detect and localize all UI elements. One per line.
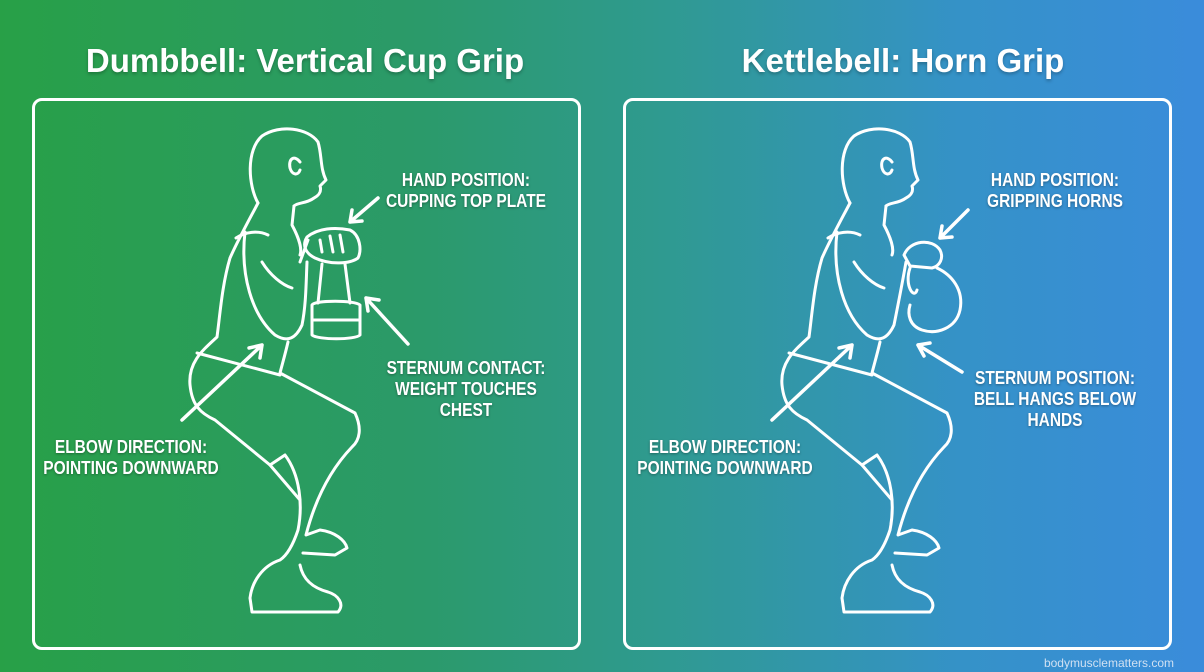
label: hand position dumbbell: CUPPING TOP PLATE (386, 191, 546, 211)
label: sternum position: HANDS (1027, 410, 1083, 430)
label: sternum position: STERNUM POSITION: (975, 368, 1135, 388)
label: elbow direction kettlebell: ELBOW DIRECTION: (649, 437, 801, 457)
kettlebell (904, 242, 942, 268)
label: hand position dumbbell (386, 170, 546, 211)
dumbbell (305, 228, 360, 263)
label: hand position kettlebell (986, 170, 1124, 211)
arrows (182, 198, 968, 420)
title: kettlebell: Kettlebell: Horn Grip (742, 42, 1064, 79)
footer credit: bodymusclematters.com (1044, 656, 1174, 670)
title: dumbbell: Dumbbell: Vertical Cup Grip (86, 42, 524, 79)
label: sternum contact (386, 358, 545, 420)
figure: dumbbell squat (190, 129, 360, 612)
label: elbow direction dumbbell: POINTING DOWNWARD (43, 458, 219, 478)
label: sternum contact: CHEST (440, 400, 492, 420)
label: hand position kettlebell: HAND POSITION: (991, 170, 1119, 190)
label: elbow direction dumbbell: ELBOW DIRECTION: (55, 437, 207, 457)
label: elbow direction kettlebell: POINTING DOWNWARD (637, 458, 813, 478)
label: hand position dumbbell: HAND POSITION: (402, 170, 530, 190)
label: elbow direction dumbbell (43, 437, 219, 478)
label: sternum position: BELL HANGS BELOW (974, 389, 1136, 409)
label: sternum position (974, 368, 1137, 430)
panel: dumbbell (32, 98, 581, 650)
panel: kettlebell (623, 98, 1172, 650)
label: hand position kettlebell: GRIPPING HORNS (987, 191, 1123, 211)
figure: kettlebell squat (782, 129, 961, 612)
label: sternum contact: STERNUM CONTACT: (387, 358, 545, 378)
label: elbow direction kettlebell (637, 437, 814, 478)
label: sternum contact: WEIGHT TOUCHES (395, 379, 537, 399)
